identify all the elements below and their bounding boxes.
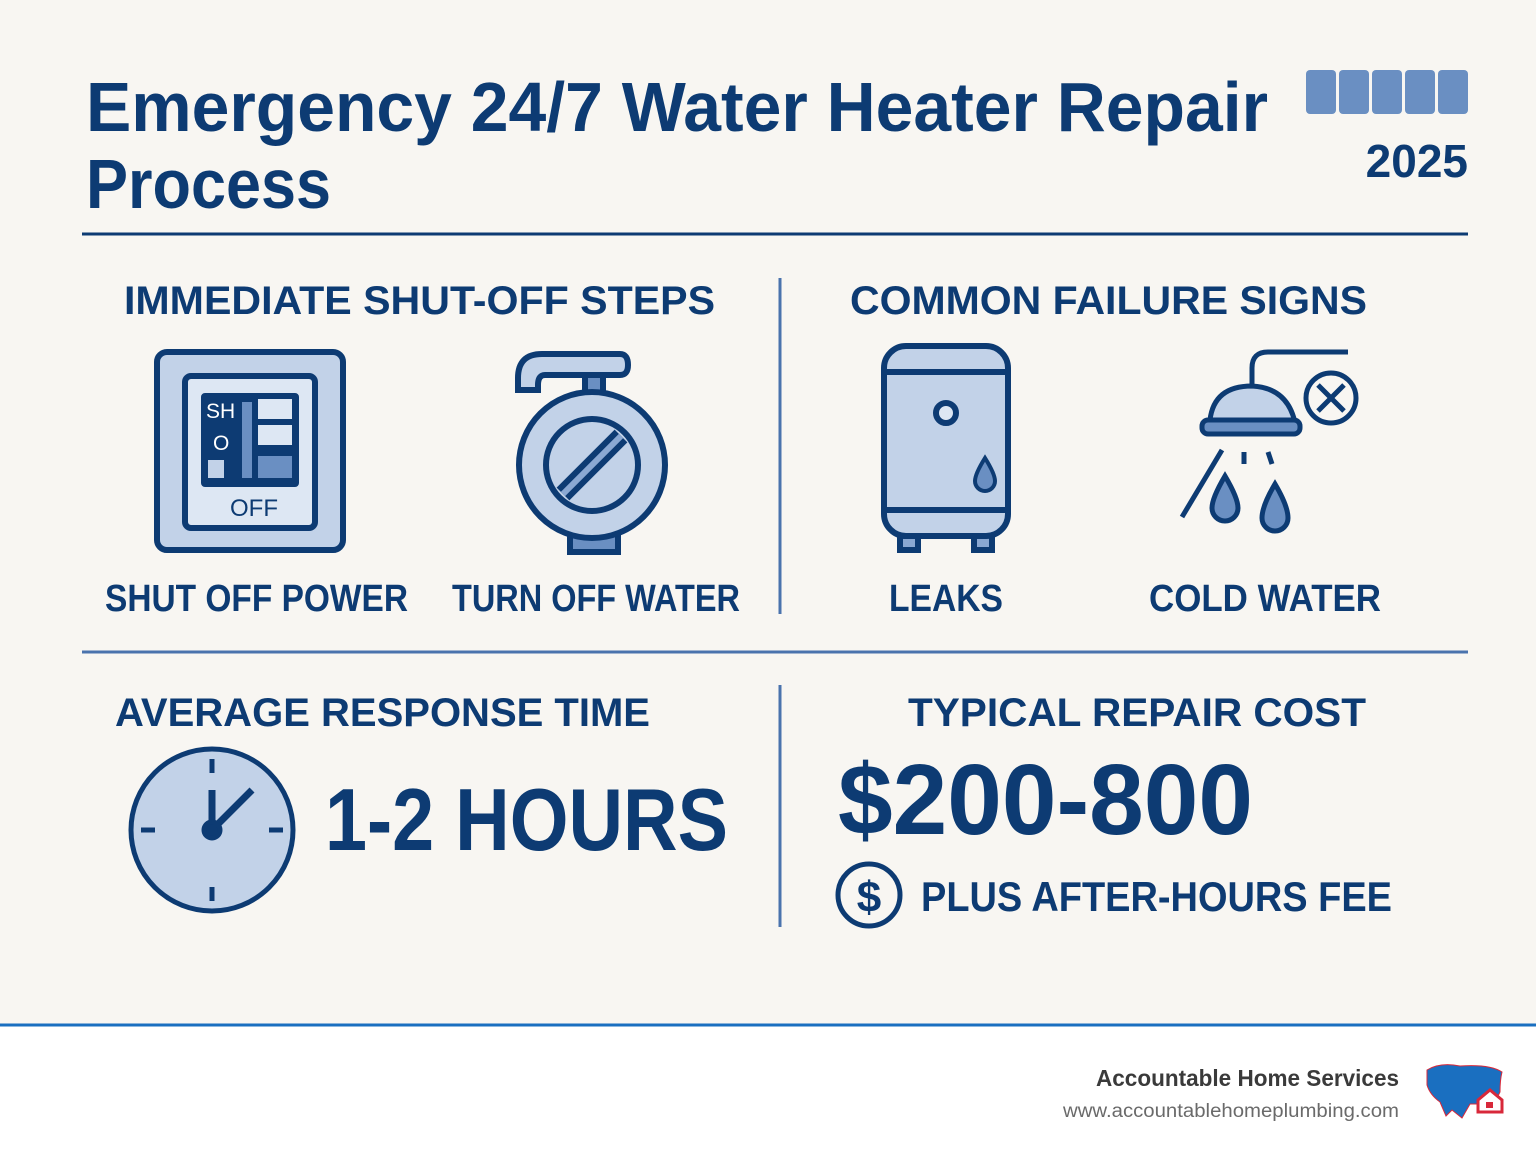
stat: cost range: $200-800 xyxy=(838,744,1253,856)
heading: common failure signs: COMMON FAILURE SIGNS xyxy=(850,279,1367,323)
icon: breaker panel: OFF xyxy=(230,495,278,522)
heading: typical repair cost: TYPICAL REPAIR COST xyxy=(908,691,1366,735)
stat: 1-2 hours: 1-2 HOURS xyxy=(325,770,728,869)
title: Process xyxy=(86,145,331,223)
icon: dollar circle xyxy=(838,864,900,926)
footer: company: Accountable Home Services xyxy=(1096,1065,1399,1091)
icon: breaker panel: O xyxy=(213,432,229,455)
text: plus after-hours fee: PLUS AFTER-HOURS FEE xyxy=(921,873,1392,920)
icon: progress bars xyxy=(1306,70,1468,114)
logo: bison with house xyxy=(1427,1065,1502,1118)
footer: company: www.accountablehomeplumbing.com xyxy=(1062,1101,1399,1122)
title xyxy=(86,68,1268,223)
label: turn off water: TURN OFF WATER xyxy=(452,578,740,620)
title: Emergency 24/7 Water Heater Repair xyxy=(86,68,1268,146)
icon: breaker panel: SH xyxy=(206,400,235,423)
panel: response time xyxy=(115,691,728,911)
icon: water valve xyxy=(518,354,665,552)
panel: repair cost xyxy=(838,691,1392,926)
footer: company xyxy=(1062,1065,1399,1122)
heading: immediate shut-off steps: IMMEDIATE SHUT-OFF STEPS xyxy=(124,279,715,323)
label: shut off power: SHUT OFF POWER xyxy=(105,578,408,620)
icon: clock xyxy=(131,749,293,911)
label: leaks: LEAKS xyxy=(889,578,1003,620)
panel: failure signs xyxy=(850,279,1381,620)
icon: breaker panel xyxy=(157,352,343,550)
year: 2025 xyxy=(1366,135,1468,187)
icon: dollar circle: $ xyxy=(857,873,881,922)
label: cold water: COLD WATER xyxy=(1149,578,1381,620)
icon: shower no hot water xyxy=(1182,352,1356,531)
heading: average response time: AVERAGE RESPONSE TIME xyxy=(115,691,650,735)
panel: shut-off steps xyxy=(105,279,740,620)
icon: water heater tank xyxy=(884,346,1008,550)
